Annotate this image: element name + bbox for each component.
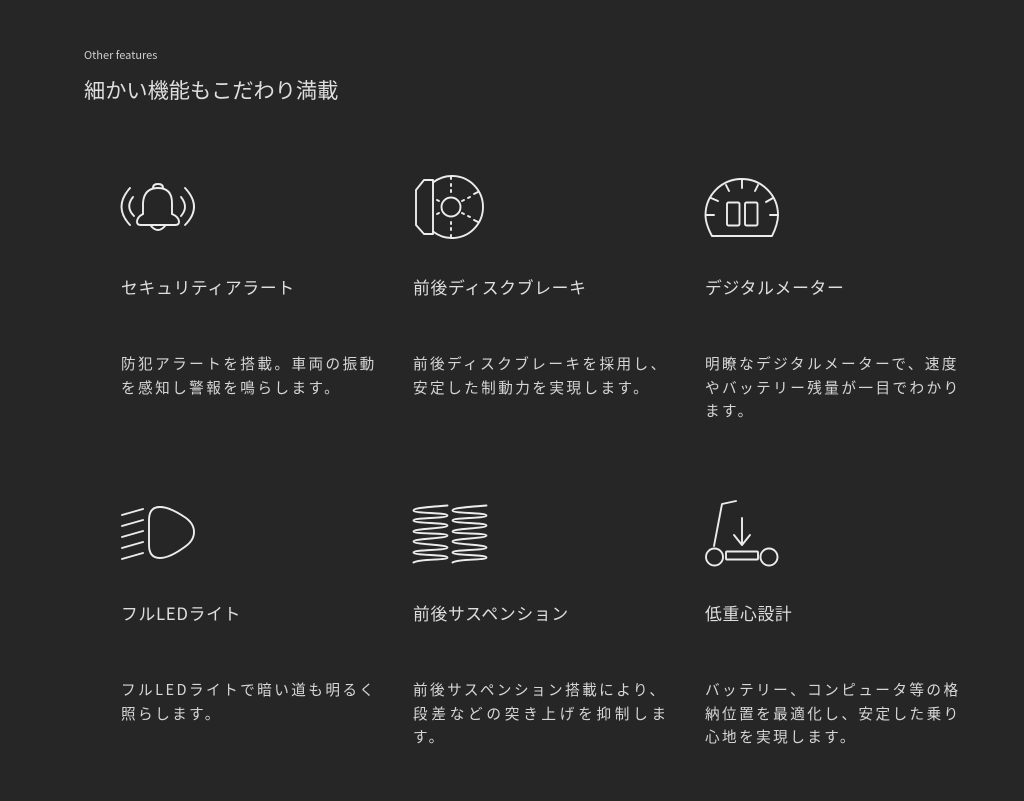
description: LED light xyxy=(121,679,376,724)
description: disc brake xyxy=(413,353,668,398)
description: low center of gravity: バッテリー、コンピュータ等の格 xyxy=(705,679,961,700)
title: security alert: セキュリティアラート xyxy=(121,274,295,298)
description: security alert xyxy=(121,353,377,398)
icon: suspension springs xyxy=(412,501,762,564)
title: suspension: 前後サスペンション xyxy=(413,600,569,624)
description: digital meter: 明瞭なデジタルメーターで、速度 xyxy=(705,353,959,374)
title: low center of gravity: 低重心設計 xyxy=(705,600,792,624)
icon: digital meter xyxy=(704,178,779,237)
main heading: 細かい機能もこだわり満載 xyxy=(84,74,338,105)
title: LED light: フルLEDライト xyxy=(121,600,241,624)
description: security alert: 防犯アラートを搭載。車両の振動 xyxy=(121,353,377,374)
description: digital meter: やバッテリー残量が一目でわかり xyxy=(705,376,961,398)
description: suspension: 段差などの突き上げを抑制しま xyxy=(413,702,670,724)
description: digital meter xyxy=(705,353,961,421)
description: suspension: 前後サスペンション搭載により、 xyxy=(413,679,666,700)
description: suspension xyxy=(413,679,670,747)
icon: security bell xyxy=(120,183,195,231)
description: disc brake: 前後ディスクブレーキを採用し、 xyxy=(413,353,668,374)
icon: disc brake xyxy=(415,175,484,239)
icon: LED headlight xyxy=(121,506,195,560)
description: low center of gravity: 納位置を最適化し、安定した乗り xyxy=(705,702,961,724)
description: disc brake: 安定した制動力を実現します。 xyxy=(413,376,650,398)
description: low center of gravity xyxy=(705,679,961,747)
description: suspension: す。 xyxy=(413,726,446,747)
description: security alert: を感知し警報を鳴らします。 xyxy=(121,376,341,398)
eyebrow label: Other features xyxy=(84,47,157,63)
title: disc brake: 前後ディスクブレーキ xyxy=(413,274,587,298)
description: digital meter: ます。 xyxy=(705,400,755,421)
description: LED light: フルLEDライトで暗い道も明るく xyxy=(121,679,376,700)
description: low center of gravity: 心地を実現します。 xyxy=(705,726,857,747)
icon: low center of gravity scooter xyxy=(705,500,778,566)
description: LED light: 照らします。 xyxy=(121,702,222,724)
title: digital meter: デジタルメーター xyxy=(705,274,845,298)
